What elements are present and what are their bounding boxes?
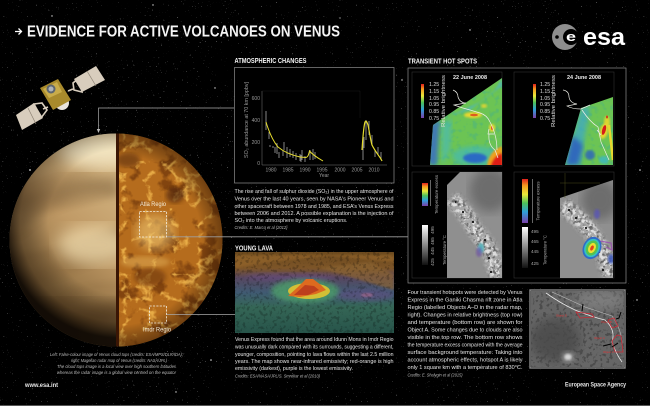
error bars xyxy=(266,111,381,162)
text: hot spots description: account atmospheric effects, hotspot A is likely xyxy=(408,358,523,364)
brightness colour scale: 0.85 xyxy=(429,109,439,115)
brightness colour scale: 0.85 xyxy=(540,109,550,115)
text: atmospheric changes: between 2006 and 2012. A possible explanation is the injection of xyxy=(234,211,394,217)
Venus caption: The cloud tops image is a local view over high southern latitudes xyxy=(57,364,177,369)
Venus caption: right: Magellan radar map of Venus (credits: NASA/JPL) xyxy=(71,358,167,363)
panel: radar map with objects A-D xyxy=(530,290,625,368)
region marker: Imdr Regio: Imdr Regio xyxy=(143,328,172,334)
text: hot spots description: visible in the top row. The bottom row shows xyxy=(408,335,523,341)
panel: transient hot spots frame xyxy=(408,68,626,283)
text: young lava: emissivity (darkest), purple is the lowest emissivity. xyxy=(235,366,353,372)
brightness colour scale: 1.15 xyxy=(429,89,439,95)
temperature grey scale: 495 xyxy=(531,229,539,234)
hotspot xyxy=(582,236,602,260)
esa logo xyxy=(552,24,626,51)
cloud tops half xyxy=(10,134,116,346)
panel: brightness map 22 June 2008 xyxy=(412,72,505,167)
text: hot spots description: Regio (labelled Objects A–D in the radar map, xyxy=(408,305,523,311)
text: hot spots description: Credits: E. Shalygin et al (2015) xyxy=(408,372,463,378)
grid lines xyxy=(560,173,600,198)
connector: Atla Regio to hot spots xyxy=(167,236,408,238)
temperature grey scale: 495 xyxy=(430,226,435,234)
brightness colour scale: 0.95 xyxy=(540,102,550,108)
region marker: Atla Regio xyxy=(140,202,167,237)
x axis labels: Year xyxy=(319,173,329,179)
website url: www.esa.int xyxy=(24,383,58,389)
date label: 22 June 2008 xyxy=(453,75,487,81)
brightness colour scale: 1.05 xyxy=(429,96,439,102)
date label: 24 June 2008 xyxy=(567,75,601,81)
text: hot spots description: surface background temperature. Taking into xyxy=(408,350,522,356)
brightness colour scale: 0.75 xyxy=(429,116,439,122)
brightness colour scale: 1.05 xyxy=(540,96,550,102)
text: young lava: younger, composition, pointing to lava flows within the last 2.5 million xyxy=(235,352,394,358)
brightness colour scale: Relative brightness xyxy=(441,75,447,127)
heading: young lava: YOUNG LAVA xyxy=(235,244,274,252)
temperature grey scale xyxy=(422,225,447,266)
region marker: Imdr Regio xyxy=(143,306,172,334)
text: atmospheric changes: The rise and fall of sulphur dioxide (SO₂) in the upper atmosphere of xyxy=(234,189,394,195)
temperature grey scale: 465 xyxy=(430,237,435,245)
text: atmospheric changes: other spacecraft between 1978 and 1985, and ESA's Venus Express xyxy=(234,204,394,210)
panel: SO2 line chart xyxy=(234,68,394,183)
panel: temperature map right xyxy=(514,172,618,279)
Venus globe: split view xyxy=(10,134,222,346)
organisation name: European Space Agency xyxy=(565,382,627,388)
text: young lava: years. The map shows near-infrared emissivity; red-orange is high xyxy=(235,359,394,365)
arrows xyxy=(582,304,621,347)
brightness colour scale: 0.95 xyxy=(429,102,439,108)
object labels xyxy=(556,314,614,354)
temperature excess scale: Temperature excess xyxy=(536,181,540,220)
text: atmospheric changes: Venus over the last 40 years, seen by NASA's Pioneer Venus and xyxy=(234,196,394,202)
title: EVIDENCE FOR ACTIVE VOLCANOES ON VENUS xyxy=(27,24,340,40)
esa logo: esa xyxy=(583,24,626,51)
text: atmospheric changes: Credits: E. Marcq et al (2012) xyxy=(234,225,288,230)
temperature grey scale: 425 xyxy=(430,258,435,266)
region marker: Atla Regio: Atla Regio xyxy=(140,202,167,208)
x axis labels: 2005 xyxy=(351,168,363,174)
rift outline xyxy=(563,90,609,160)
text: young lava xyxy=(234,337,394,378)
Venus caption xyxy=(50,352,184,375)
heading: atmospheric changes: ATMOSPHERIC CHANGES xyxy=(234,56,307,65)
y axis title: SO₂ abundance at 70 km [ppbv] xyxy=(244,81,250,158)
x axis labels: 1980 xyxy=(265,168,277,174)
temperature grey scale: 445 xyxy=(531,249,539,254)
brightness colour scale: Relative brightness xyxy=(551,75,557,127)
temperature grey scale: Temperature °C xyxy=(442,234,447,265)
x axis labels: 1990 xyxy=(299,168,311,174)
text: hot spots description: right). Changes in relative brightness (top row) xyxy=(408,312,523,318)
x axis labels: 2000 xyxy=(334,168,346,174)
temperature grey scale: 425 xyxy=(531,261,539,266)
arrow: spacecraft data to Venus xyxy=(97,108,234,133)
connector: Imdr Regio to young lava xyxy=(167,314,235,316)
temperature grey scale xyxy=(522,227,548,268)
x axis labels: 1995 xyxy=(316,168,328,174)
y axis labels: 200 xyxy=(252,140,260,146)
brightness colour scale xyxy=(421,75,447,127)
x axis labels: 1985 xyxy=(282,168,294,174)
text: young lava: was unusually dark compared with its surrounds, suggesting a different, xyxy=(234,344,394,350)
y axis labels xyxy=(252,96,260,167)
temperature grey scale: 445 xyxy=(430,247,435,255)
text: young lava: Venus Express found that the area around Idunn Mons in Imdr Regio xyxy=(235,337,394,343)
brightness colour scale: 1.25 xyxy=(540,82,550,88)
object labels: Object B xyxy=(601,320,612,324)
text: hot spots description: Express in the Ganiki Chasma rift zone in Atla xyxy=(408,298,523,304)
brightness colour scale xyxy=(533,75,557,127)
trend lines xyxy=(266,121,382,161)
brightness colour scale: 1.15 xyxy=(540,89,550,95)
mountain: Idunn Mons xyxy=(288,279,330,299)
heading: transient hot spots: TRANSIENT HOT SPOTS xyxy=(408,56,477,66)
x axis labels xyxy=(265,168,380,179)
y axis labels: 600 xyxy=(252,96,260,102)
text: atmospheric changes: SO₂ into the atmosphere by volcanic eruptions. xyxy=(234,218,348,224)
Venus caption: whereas the radar image is a global view centred on the equator xyxy=(57,370,177,375)
temperature grey scale: Temperature °C xyxy=(542,234,548,265)
x axis labels: 2010 xyxy=(368,168,380,174)
text: hot spots description: only 1 square km with a temperature of 830°C. xyxy=(408,365,523,371)
panel: brightness map 24 June 2008 xyxy=(514,72,615,167)
temperature grey scale: 465 xyxy=(531,239,539,244)
object labels: Object A xyxy=(603,350,614,354)
temperature excess scale: Temperature excess xyxy=(434,174,439,214)
Venus caption: Left: False-colour image of Venus cloud tops (credits: ESA/MPS/DLR/IDA); xyxy=(50,352,184,357)
brightness colour scale: 1.25 xyxy=(429,82,439,88)
text: hot spots description: and temperature (bottom row) are shown for xyxy=(408,320,523,326)
object labels: Object C xyxy=(594,336,605,340)
brightness colour scale: 0.75 xyxy=(540,116,550,122)
y axis labels: 400 xyxy=(252,118,260,124)
object labels: Object D xyxy=(556,314,567,318)
panel: temperature map left xyxy=(412,172,502,278)
esa logo: e xyxy=(566,29,576,44)
text: hot spots description xyxy=(408,290,523,378)
panel: young lava 3D emissivity map xyxy=(235,252,395,333)
text: hot spots description: the temperature excess compared with the average xyxy=(408,342,522,348)
rift outline xyxy=(453,90,498,158)
text: young lava: Credits: ESA/NASA/JPL/S. Smrekar et al (2010) xyxy=(235,374,320,378)
text: atmospheric changes xyxy=(234,189,394,230)
text: hot spots description: Four transient hotspots were detected by Venus xyxy=(408,290,523,296)
text: hot spots description: Object A. Some changes due to clouds are also xyxy=(408,328,522,334)
object outlines xyxy=(576,312,623,352)
spacecraft illustration xyxy=(16,66,105,130)
y axis labels: 0 xyxy=(257,161,260,167)
radar map half xyxy=(119,134,222,346)
